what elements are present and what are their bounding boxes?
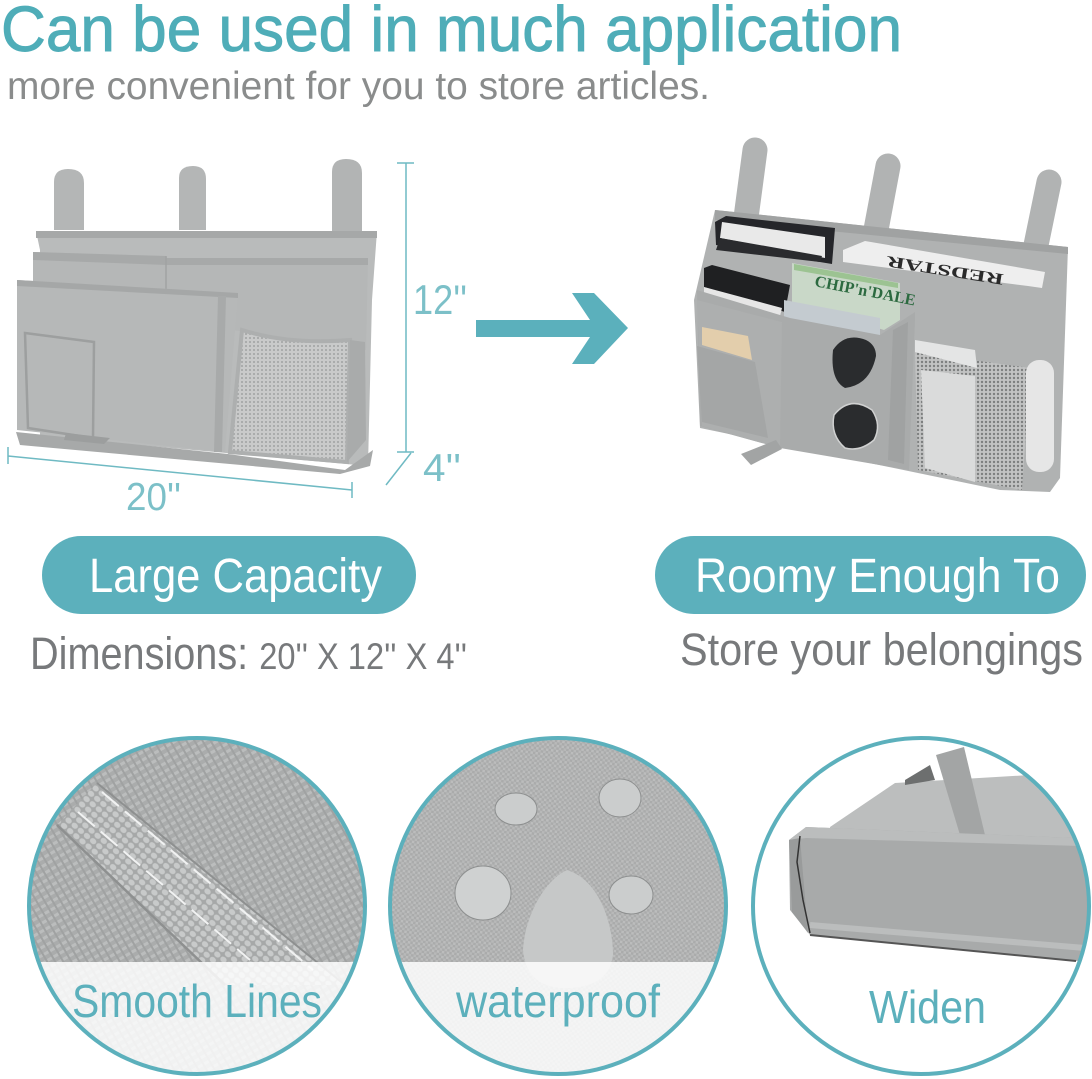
power bank: [915, 340, 977, 368]
circle: smooth lines: [20, 730, 380, 1079]
top left book: [715, 216, 835, 264]
label 20 inch: 20'': [126, 476, 181, 519]
circle: smooth lines: Smooth Lines: [72, 975, 322, 1027]
filled organizer product illustration: REDSTAR: [885, 252, 1005, 287]
circle: widen: [745, 730, 1092, 1079]
hanging straps: [745, 150, 1049, 250]
pill: roomy enough to: Roomy Enough To: [695, 550, 1060, 603]
pull tab: [741, 440, 782, 465]
pill: large capacity: [42, 536, 416, 614]
phone: [702, 327, 752, 360]
empty organizer product illustration: [16, 159, 377, 474]
sunglasses: [832, 338, 878, 449]
label 4 inch: 4'': [423, 447, 461, 490]
depth dimension line: [386, 453, 411, 485]
tablet: [784, 300, 880, 338]
circle: waterproof: waterproof: [455, 975, 660, 1027]
second book: [704, 265, 790, 312]
circle: waterproof: [380, 730, 740, 1079]
arrow: [476, 293, 628, 364]
redstar book: [843, 241, 1045, 288]
filled organizer product illustration: [694, 150, 1068, 492]
hanging straps: [54, 159, 362, 231]
magazine: [792, 263, 900, 330]
pill: roomy enough to: [655, 536, 1086, 614]
subtitle: more convenient for you to store articles.: [7, 65, 710, 108]
width dimension line: [8, 447, 352, 498]
label 12 inch: 12'': [413, 276, 467, 323]
mesh pocket: [915, 352, 1030, 490]
front pocket panel: [697, 290, 915, 470]
filled organizer product illustration: CHIP'n'DALE: [813, 273, 917, 309]
circle: widen: Widen: [869, 981, 986, 1033]
pill: large capacity: Large Capacity: [89, 550, 382, 603]
small pocket: [697, 346, 768, 438]
bottle: [1026, 360, 1054, 472]
back panel: [694, 210, 1068, 492]
dimensions text: Dimensions: 20'' X 12'' X 4'': [30, 628, 467, 679]
height dimension line: [397, 163, 414, 452]
